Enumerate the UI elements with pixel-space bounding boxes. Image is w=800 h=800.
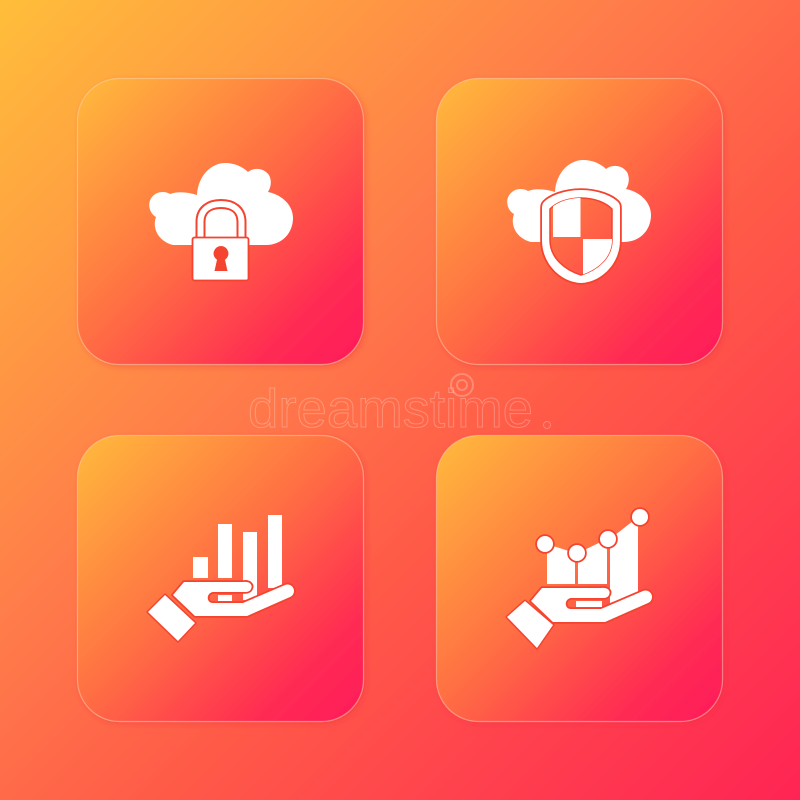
panel: cloud lock card (78, 78, 364, 364)
icon: hand holding line chart (507, 509, 652, 648)
watermark: dreamstime (248, 379, 533, 439)
icon: cloud with shield (507, 160, 651, 283)
icon: hand holding bar chart (148, 515, 294, 641)
icon: cloud with padlock (149, 163, 293, 280)
panel: cloud shield card (436, 78, 722, 364)
panel: bar chart hand card (78, 436, 364, 722)
panel: line chart hand card (436, 436, 722, 722)
